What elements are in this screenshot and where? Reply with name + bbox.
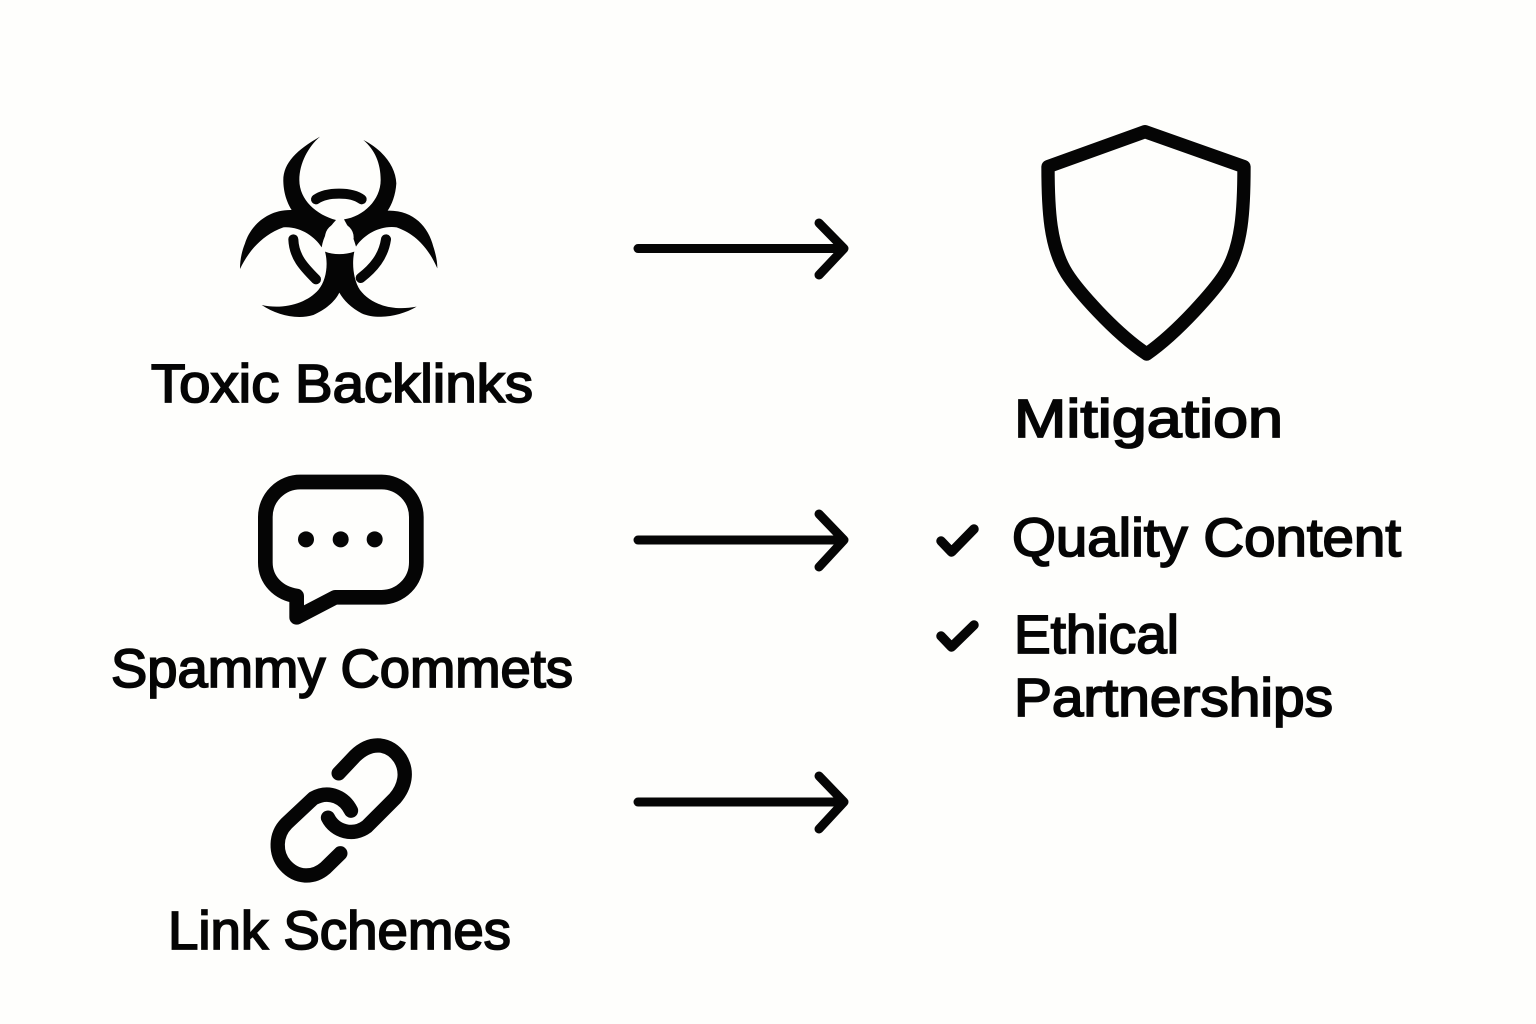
icon: chain link bbox=[278, 745, 405, 875]
label: Spammy Commets: Spammy Commets bbox=[111, 639, 573, 699]
arrow: toxic backlinks to mitigation bbox=[638, 223, 844, 275]
label: Link Schemes: Link Schemes bbox=[168, 901, 511, 961]
heading: Mitigation: Mitigation bbox=[1014, 389, 1283, 449]
icon: check mark for ethical partnerships bbox=[941, 625, 974, 647]
arrow: spammy comments to mitigation bbox=[638, 514, 844, 567]
text: Ethical Partnerships: Ethical bbox=[1014, 605, 1179, 665]
icon: biohazard bbox=[240, 137, 437, 317]
text: Ethical Partnerships: Partnerships bbox=[1014, 668, 1333, 728]
arrow: link schemes to mitigation bbox=[638, 776, 844, 829]
label: Toxic Backlinks: Toxic Backlinks bbox=[151, 354, 533, 414]
icon: chat bubble bbox=[265, 482, 416, 617]
icon: shield bbox=[1048, 132, 1244, 354]
text: Quality Content: Quality Content bbox=[1012, 508, 1401, 568]
text: Ethical Partnerships bbox=[1014, 605, 1333, 728]
icon: check mark for quality content bbox=[941, 529, 974, 552]
